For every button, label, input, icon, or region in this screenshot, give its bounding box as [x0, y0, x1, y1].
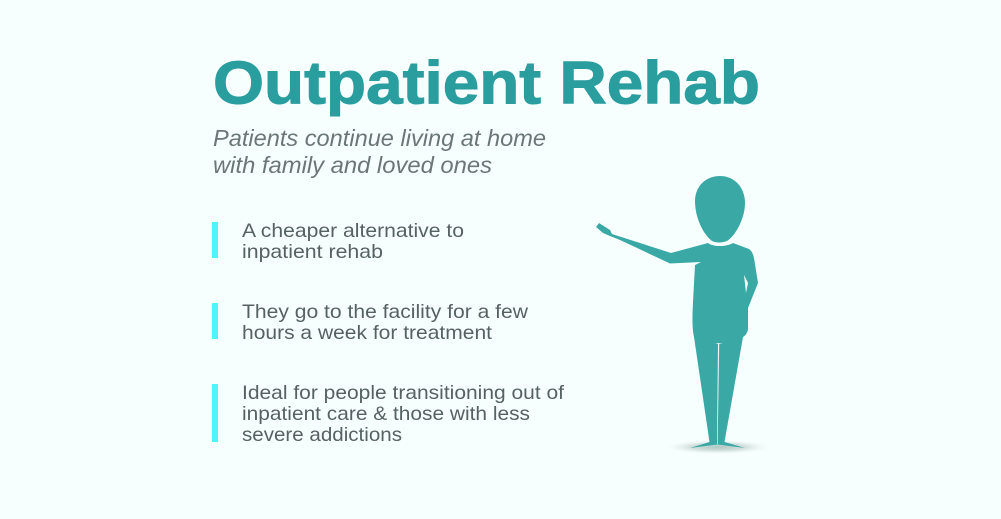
shadow	[662, 440, 774, 454]
subtitle: Patients continue living at home	[213, 125, 546, 151]
bullet 2	[212, 301, 529, 344]
subtitle: with family and loved ones	[213, 152, 493, 178]
subtitle	[213, 125, 546, 178]
bullet 3: Ideal for people transitioning out of	[242, 382, 565, 404]
icon: person pointing	[596, 176, 774, 454]
bullet 2: hours a week for treatment	[242, 322, 493, 344]
title: Outpatient Rehab	[213, 50, 760, 116]
bullet 2: They go to the facility for a few	[242, 301, 529, 323]
leg gap	[715, 343, 723, 444]
bullet 3: inpatient care & those with less	[242, 403, 530, 425]
arm gap	[744, 275, 748, 293]
bullet 1: A cheaper alternative to	[242, 220, 464, 242]
bullet 1: inpatient rehab	[242, 241, 383, 263]
bullet 1	[212, 220, 464, 263]
bullet 3: severe addictions	[242, 424, 402, 446]
head	[695, 176, 745, 242]
body	[596, 223, 758, 448]
bullet 3	[212, 382, 565, 446]
